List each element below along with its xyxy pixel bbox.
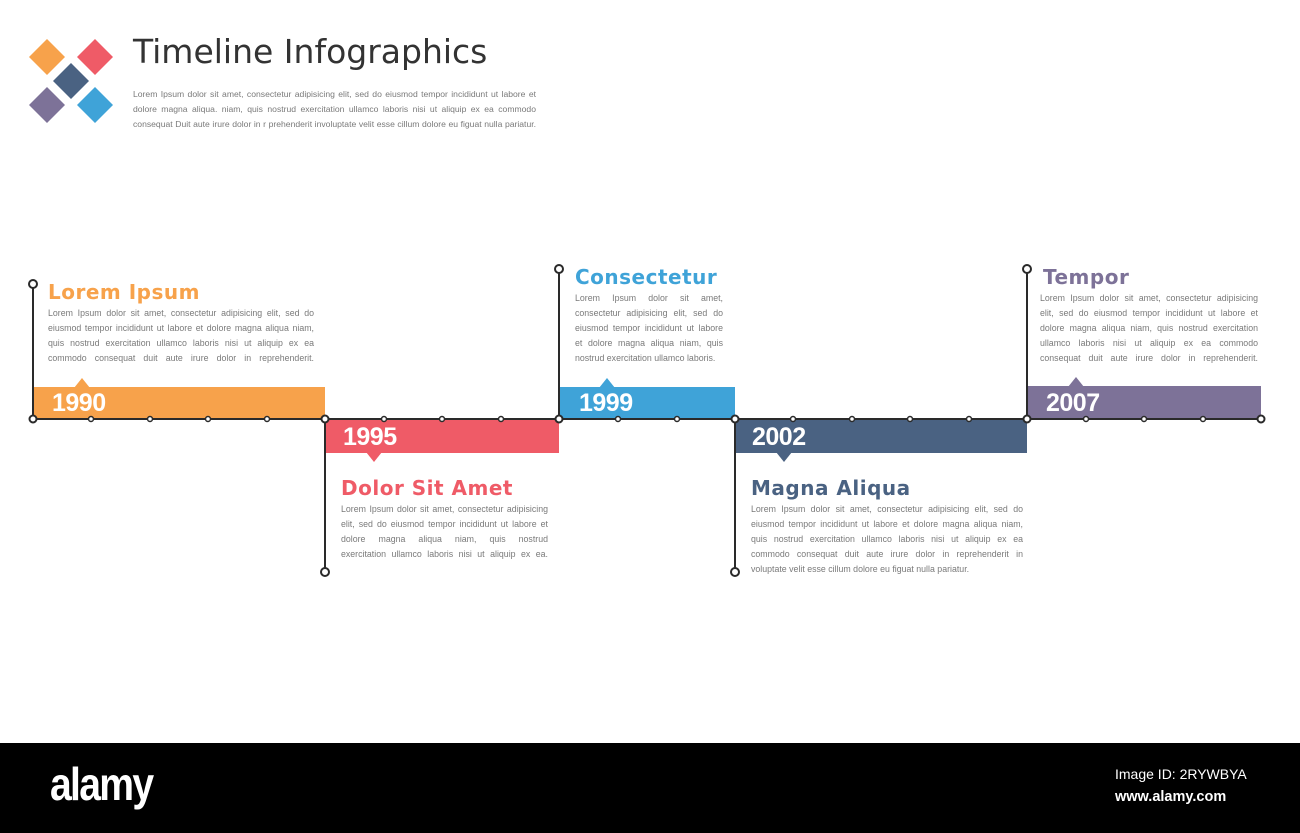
panel: Consectetur: consectetur adipisicing elit, sed do [575,308,723,318]
panel: Lorem Ipsum: quis nostrud exercitation ullamco laboris nisi ut aliquip ex ea [48,338,314,348]
year 1999: 1999 [579,389,633,417]
logo [29,39,113,123]
bar: 1990 [33,378,325,419]
bar: 2002 [735,419,1027,462]
panel: Consectetur: Consectetur [575,265,717,289]
panel: Dolor Sit Amet: exercitation ullamco laboris nisi ut aliquip ex ea. [341,549,548,559]
panel: Consectetur: Lorem Ipsum dolor sit amet, [575,293,723,303]
panel: Lorem Ipsum: Lorem Ipsum dolor sit amet, consectetur adipisicing elit, sed do [48,308,314,318]
panel: Dolor Sit Amet: Dolor Sit Amet [341,476,513,500]
panel: Consectetur: et dolore magna aliqua niam, quis [575,338,723,348]
panel: Magna Aliqua [751,476,1023,574]
footer image id: Image ID: 2RYWBYA [1115,766,1247,782]
panel: Tempor [1040,265,1258,363]
year 2002: 2002 [752,423,806,451]
panel: Magna Aliqua: voluptate velit esse cillum dolore eu figuat nulla pariatur. [751,564,969,574]
bar: 2007 [1027,377,1261,419]
title: Timeline Infographics [133,32,487,71]
footer bar [0,743,1300,833]
intro text: consequat Duit aute irure dolor in r prehenderit involuptate velit esse cillum dolore eu figuat nulla pariatur. [133,119,536,129]
panel: Lorem Ipsum: Lorem Ipsum [48,280,200,304]
panel: Tempor: Tempor [1043,265,1129,289]
bar: 1995 [325,419,559,462]
panel: Consectetur [575,265,723,363]
panel: Magna Aliqua: Magna Aliqua [751,476,911,500]
panel: Magna Aliqua: commodo consequat duit aute irure dolor in reprehenderit in [751,549,1023,559]
panel: Lorem Ipsum: eiusmod tempor incididunt ut labore et dolore magna aliqua niam, [48,323,314,333]
intro text: dolore magna aliqua. niam, quis nostrud exercitation ullamco laboris nisi ut aliquip ex ea commodo [133,104,536,114]
bar: 1999 [559,378,735,419]
year labels: 1990 [52,389,106,417]
year 2007: 2007 [1046,389,1100,417]
panel: Dolor Sit Amet: dolore magna aliqua niam, quis nostrud [341,534,548,544]
panel: Dolor Sit Amet: Lorem Ipsum dolor sit amet, consectetur adipisicing [341,504,548,514]
panel: Consectetur: eiusmod tempor incididunt ut labore [575,323,723,333]
panel: Magna Aliqua: Lorem Ipsum dolor sit amet, consectetur adipisicing elit, sed do [751,504,1023,514]
panel: Tempor: consequat duit aute irure dolor in reprehenderit. [1040,353,1258,363]
panel: Tempor: dolore magna aliqua niam, quis nostrud exercitation [1040,323,1258,333]
panel: Magna Aliqua: eiusmod tempor incididunt ut labore et dolore magna aliqua niam, [751,519,1023,529]
panel: Lorem Ipsum [48,280,314,363]
intro text: Lorem Ipsum dolor sit amet, consectetur adipisicing elit, sed do eiusmod tempor incididunt ut labore et [133,89,536,99]
footer url: www.alamy.com [1115,789,1226,805]
panel: Tempor: Lorem Ipsum dolor sit amet, consectetur adipisicing [1040,293,1258,303]
panel: Lorem Ipsum: commodo consequat duit aute irure dolor in reprehenderit. [48,353,314,363]
panel: Magna Aliqua: quis nostrud exercitation ullamco laboris nisi ut aliquip ex ea [751,534,1023,544]
year 1995: 1995 [343,423,397,451]
panel: Consectetur: nostrud exercitation ullamco laboris. [575,353,715,363]
panel: Tempor: ullamco laboris nisi ut aliquip ex ea commodo [1040,338,1258,348]
footer logo: alamy [50,758,152,810]
panel: Dolor Sit Amet: elit, sed do eiusmod tempor incididunt ut labore et [341,519,548,529]
panel: Dolor Sit Amet [341,476,548,559]
panel: Tempor: elit, sed do eiusmod tempor incididunt ut labore et [1040,308,1258,318]
intro text [133,89,536,129]
